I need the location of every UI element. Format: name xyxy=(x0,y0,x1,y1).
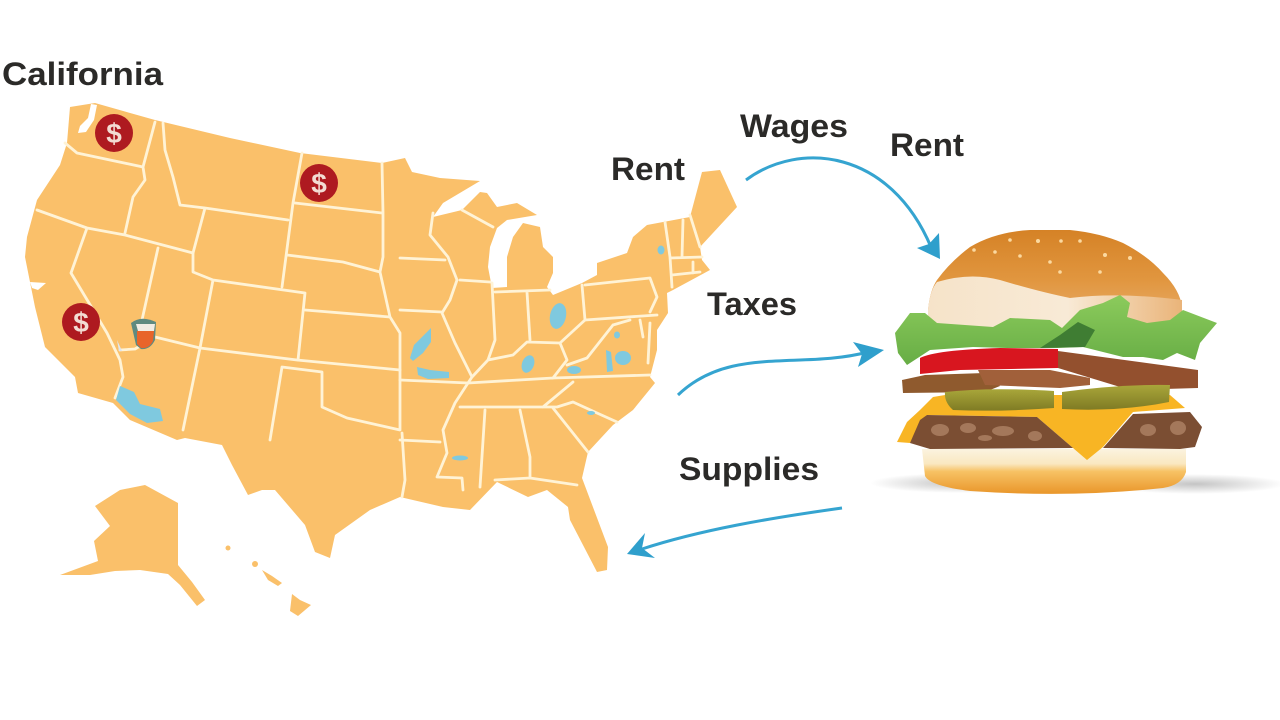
label: Rent right: Rent xyxy=(890,127,964,163)
Puget Sound and bay xyxy=(30,104,97,290)
ham slice left xyxy=(902,373,1000,393)
state borders xyxy=(37,122,702,497)
icon: dollar badge California: $ xyxy=(73,307,89,338)
pickles xyxy=(945,385,1170,411)
title: California: California xyxy=(2,56,163,92)
bottom bun xyxy=(922,449,1186,494)
beef patty right xyxy=(1103,412,1202,449)
arrow: wages to burger xyxy=(746,158,940,259)
icon: dollar badge California xyxy=(62,303,100,341)
tomato xyxy=(920,348,1058,374)
label: Supplies: Supplies xyxy=(679,451,819,487)
beef patty left xyxy=(910,415,1073,449)
ham slice right xyxy=(1058,351,1198,390)
label: Rent left: Rent xyxy=(611,151,685,187)
icon: dollar badge Dakota: $ xyxy=(311,168,327,199)
lettuce xyxy=(895,295,1217,365)
cheese xyxy=(897,395,1185,460)
ham slice centre xyxy=(978,370,1090,388)
ground shadow xyxy=(870,473,1280,494)
label: Wages: Wages xyxy=(740,108,848,144)
US map xyxy=(25,103,737,616)
lettuce shadow xyxy=(1040,322,1095,348)
label: Taxes: Taxes xyxy=(707,286,797,322)
contiguous states xyxy=(25,103,737,572)
top bun xyxy=(928,230,1182,330)
icon: dollar badge Dakota xyxy=(300,164,338,202)
Alaska xyxy=(60,485,205,606)
burger illustration xyxy=(870,230,1280,494)
arrow: taxes to burger xyxy=(678,342,884,395)
arrow: supplies from burger xyxy=(627,508,842,558)
water bodies xyxy=(116,246,664,460)
icon: dollar badge Washington xyxy=(95,114,133,152)
icon: dollar badge Washington: $ xyxy=(106,118,122,149)
bun pale highlight xyxy=(928,276,1182,330)
patty texture xyxy=(931,421,1186,441)
sesame seeds xyxy=(972,238,1132,274)
icon: small fuel marker xyxy=(117,319,156,351)
Hawaii xyxy=(226,546,311,616)
